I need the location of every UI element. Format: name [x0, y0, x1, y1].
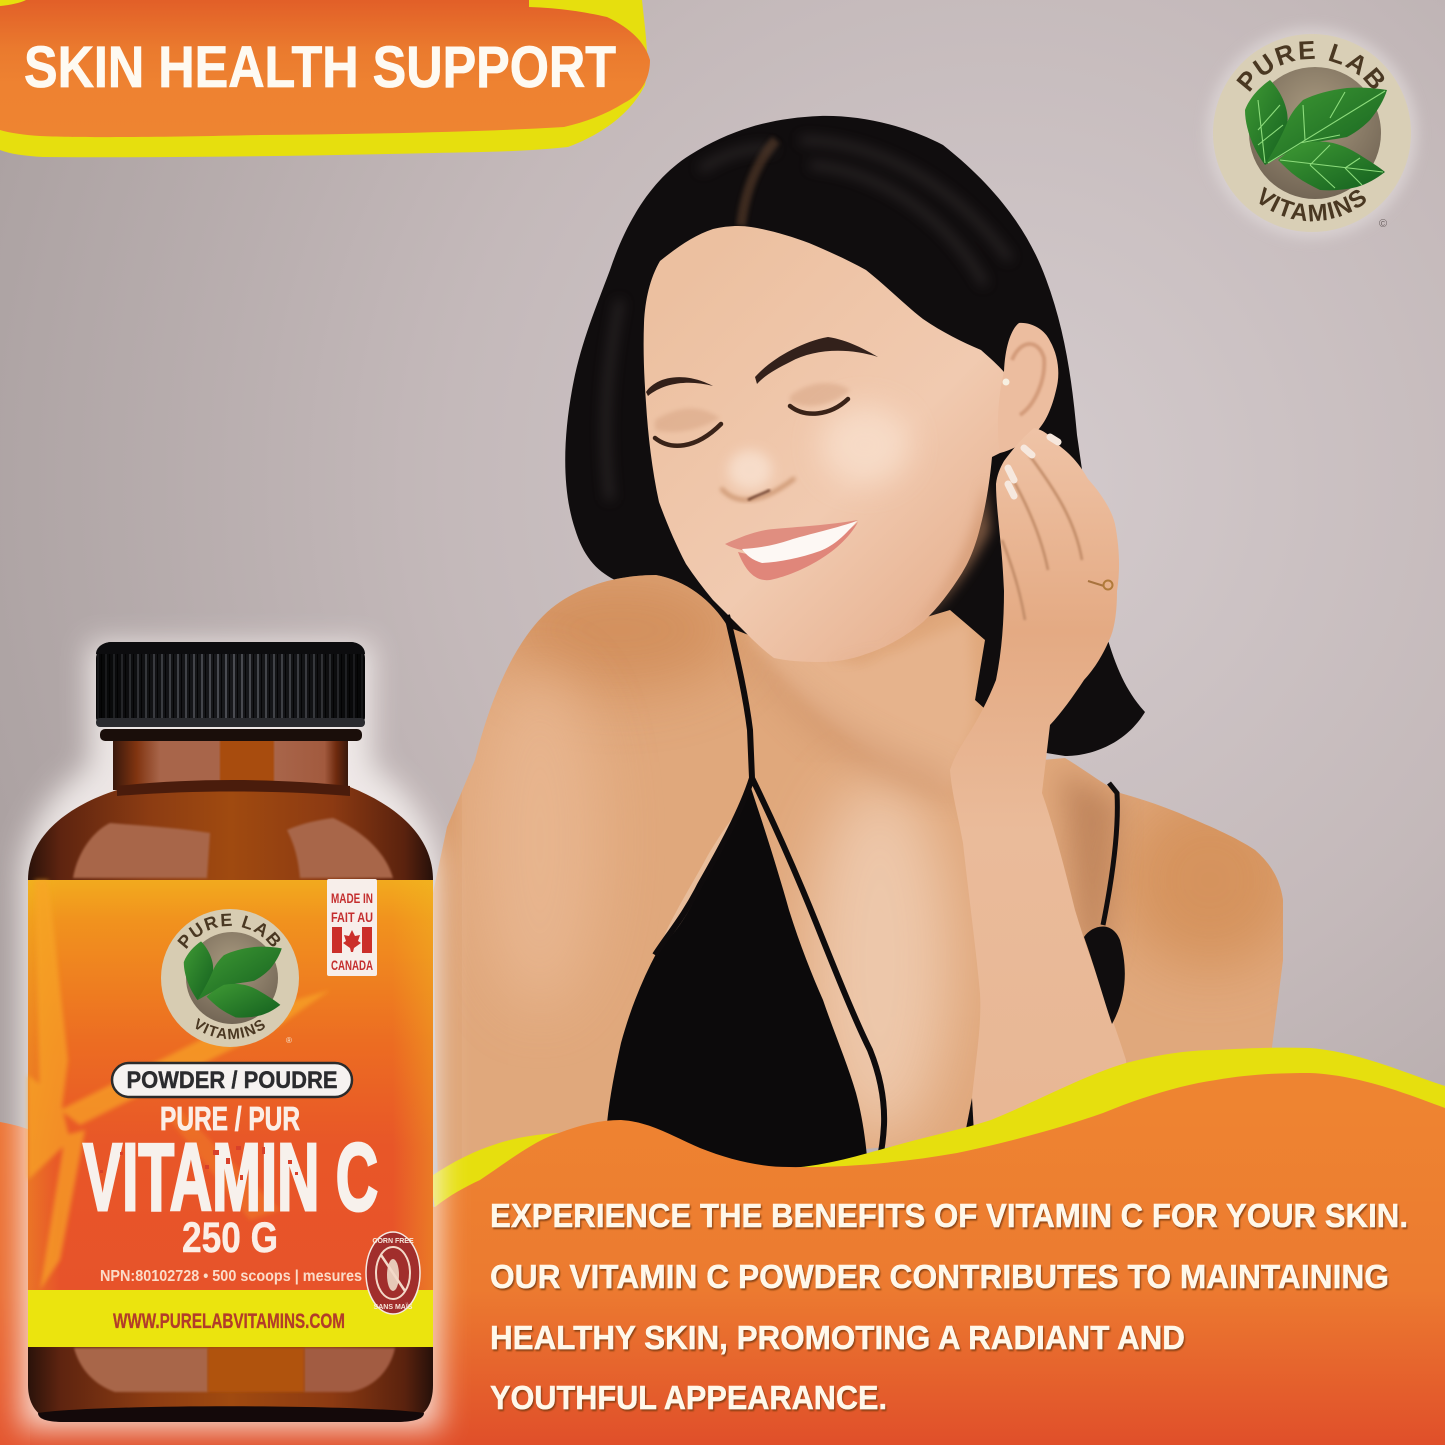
badge text made in: MADE IN [331, 890, 373, 906]
label logo text: PURE LAB [177, 914, 280, 949]
pure pur text: PURE / PUR [160, 1100, 300, 1137]
shoulder highlight right [287, 818, 393, 878]
label logo inner [186, 932, 278, 1024]
bottle glow [28, 650, 433, 1422]
canadian flag [332, 927, 372, 953]
far strap [1103, 783, 1117, 925]
logo glow [1206, 27, 1418, 239]
leaf left [1245, 80, 1288, 165]
registered mark: ® [286, 1036, 292, 1045]
powder pill: POWDER / POUDRE [126, 1067, 338, 1094]
copyright mark: © [1379, 218, 1387, 230]
website url: WWW.PURELABVITAMINS.COM [113, 1310, 345, 1333]
arm edge tone [433, 796, 460, 1172]
nose shade [721, 478, 795, 500]
size 250 g: 250 G [182, 1214, 278, 1262]
heading: SKIN HEALTH SUPPORT [24, 35, 616, 100]
orange banner [0, 0, 650, 137]
skin sliver [658, 812, 738, 950]
shoulder highlight left [73, 823, 210, 878]
badge text canada: CANADA [331, 957, 373, 973]
neck lip [100, 729, 362, 741]
yellow wave edge right [790, 1048, 1445, 1200]
logo text: PURE LAB [1236, 41, 1384, 92]
orange wave [0, 1073, 1445, 1445]
left arm highlight [480, 670, 600, 1010]
nostril [748, 490, 770, 500]
bottom highlight left [74, 1348, 208, 1392]
product bottle [0, 628, 462, 1445]
label logo ring [161, 909, 299, 1047]
right eye closed [790, 399, 848, 414]
made in canada badge [327, 879, 377, 976]
corn free badge: CORN FREE [372, 1238, 414, 1245]
logo inner [1249, 67, 1381, 199]
earring [1002, 378, 1010, 386]
bottle base [38, 1406, 424, 1422]
ear [998, 323, 1058, 453]
left corner tone [0, 1122, 30, 1445]
shoulder tone [500, 570, 740, 690]
hair back [565, 116, 1145, 756]
right eyebrow [755, 337, 878, 384]
left eyebrow [646, 377, 713, 396]
bikini straps [655, 615, 884, 1172]
badge panel [327, 879, 377, 976]
woman photo [420, 116, 1300, 1200]
bikini top left cup [606, 785, 868, 1170]
bottle neck [113, 738, 348, 790]
bikini lower right [958, 1098, 976, 1170]
yellow banner backing [0, 0, 647, 157]
line 3: HEALTHY SKIN, PROMOTING A RADIANT AND [490, 1319, 1185, 1356]
nails [1008, 437, 1058, 496]
logo text bottom: VITAMINS [1260, 186, 1366, 222]
corn free badge: SANS MAÏS [374, 1303, 413, 1311]
shoulder ring [117, 780, 350, 796]
bottle label [28, 880, 433, 1292]
left eye closed [655, 424, 721, 446]
hair parting [741, 140, 776, 226]
neck tone [745, 620, 975, 790]
leaf veins [1258, 91, 1385, 188]
logo ring [1213, 34, 1411, 232]
bottle cap [96, 642, 365, 727]
lower lip [738, 522, 858, 580]
label rays [28, 880, 330, 1290]
line 2: OUR VITAMIN C POWDER CONTRIBUTES TO MAINTAINING [490, 1258, 1389, 1295]
hand and forearm [950, 428, 1130, 1130]
bottom wave [0, 1048, 1445, 1445]
left eye shadow [655, 408, 720, 432]
neck shadow [786, 684, 947, 791]
body skin [420, 560, 1300, 1200]
leaf right [1265, 88, 1387, 165]
line 4: YOUTHFUL APPEARANCE. [490, 1379, 887, 1416]
far shoulder tone [1120, 790, 1300, 970]
ear inner [1012, 344, 1044, 415]
hair sheen [606, 140, 1010, 500]
label edge shade [28, 880, 433, 1292]
label logo text bottom: VITAMINS [196, 1018, 265, 1040]
bottom highlight right [304, 1348, 395, 1392]
distress specks [100, 1146, 298, 1180]
bottom centre [208, 1348, 304, 1392]
cheek shadow [830, 480, 990, 662]
ring [1088, 580, 1112, 590]
bottle body [28, 787, 433, 1422]
label logo [161, 909, 299, 1047]
teeth [742, 521, 857, 563]
corner accent [0, 0, 26, 6]
upper lip [725, 520, 858, 552]
bikini right cup [1084, 926, 1125, 1024]
vitamin c title: VITAMIN C [83, 1124, 378, 1231]
line 1: EXPERIENCE THE BENEFITS OF VITAMIN C FOR YOUR SKIN. [490, 1197, 1408, 1234]
body copy [490, 1197, 1408, 1416]
badge text fait au: FAIT AU [331, 909, 373, 925]
header banner [0, 0, 650, 157]
face [644, 226, 1004, 662]
nose glow [728, 450, 772, 490]
npn text: NPN:80102728 • 500 scoops | mesures [100, 1268, 362, 1285]
corn free badge [366, 1232, 420, 1314]
label yellow strip [28, 1290, 433, 1347]
finger lines [1002, 456, 1082, 620]
cheek glow [820, 405, 910, 485]
far shadow [1060, 770, 1120, 960]
right eye shadow [790, 383, 850, 406]
leaf bottom [1278, 142, 1385, 190]
yellow wave edge left [430, 1133, 560, 1215]
label leaves [184, 941, 282, 1018]
chest highlight [810, 780, 950, 1140]
brand logo [1206, 26, 1419, 240]
